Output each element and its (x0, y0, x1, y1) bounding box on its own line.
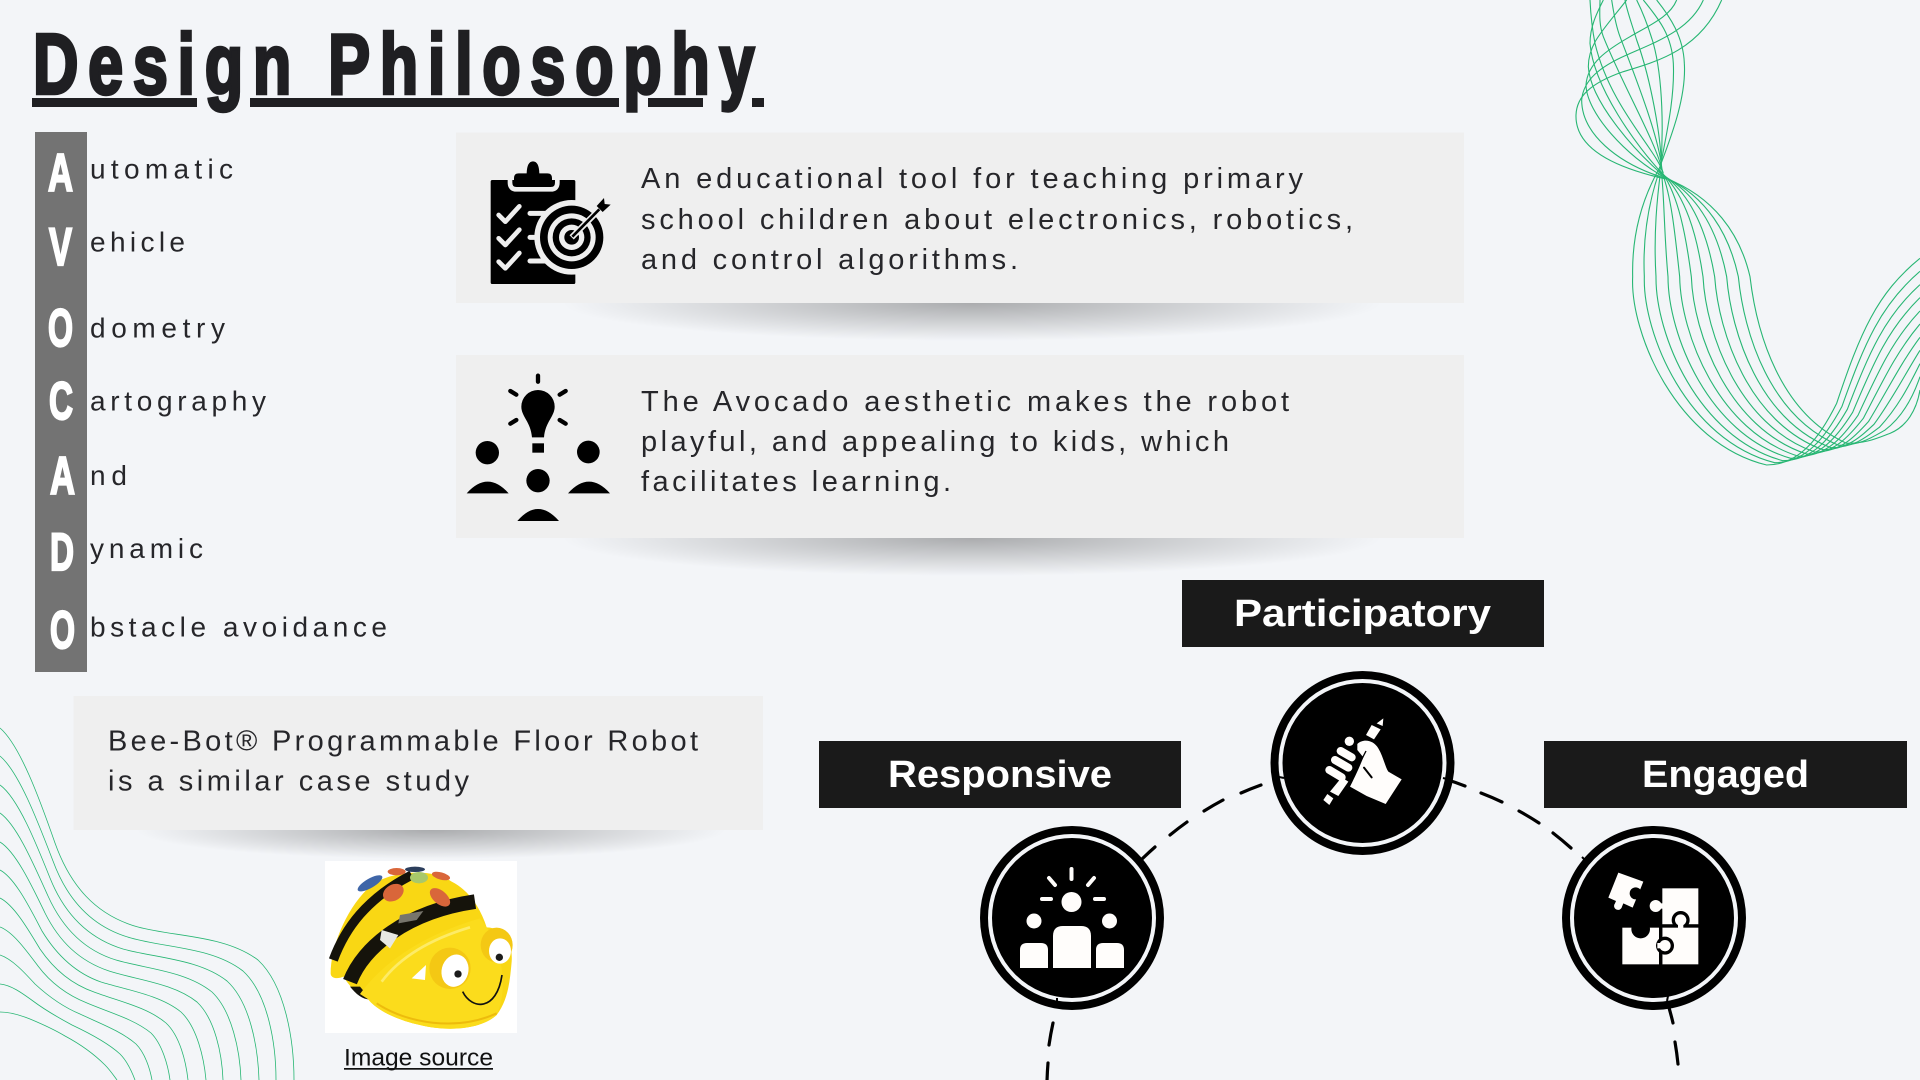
label: Participatory (1182, 580, 1544, 647)
text: educational tool: and control algorithms. (641, 244, 1018, 276)
link: image source: Image source (344, 1044, 493, 1072)
panel: bee-bot case study (74, 696, 763, 859)
acronym letters (48, 144, 75, 660)
text: educational tool (641, 163, 1353, 276)
image: bee-bot robot (325, 861, 517, 1033)
title: Design Philosophy (33, 16, 755, 112)
text: avocado aesthetic: facilitates learning. (641, 466, 951, 498)
label: Participatory: Participatory (1234, 593, 1491, 635)
acronym letters: O (48, 299, 73, 358)
acronym letters: C (49, 372, 73, 431)
acronym letters: V (49, 218, 72, 277)
text: bee-bot case study (108, 726, 698, 798)
acronym letters: O (50, 601, 75, 660)
label: Responsive (819, 741, 1181, 808)
acronym words: dometry (90, 312, 225, 344)
acronym letters: A (50, 447, 75, 506)
icon: lightbulb and people (467, 376, 610, 521)
decorative wave: top right ribbon (1576, 0, 1920, 465)
text: bee-bot case study: is a similar case study (108, 766, 470, 798)
label: Engaged: Engaged (1642, 754, 1809, 796)
text: bee-bot case study: Bee-Bot® Programmable Floor Robot (108, 726, 698, 758)
acronym: AVOCADO (35, 132, 387, 672)
decorative wave: bottom left ribbon (0, 728, 294, 1080)
label: Responsive: Responsive (888, 754, 1112, 796)
acronym letters: D (50, 523, 74, 582)
acronym words: bstacle avoidance (90, 612, 387, 642)
acronym letters: A (48, 144, 73, 203)
text: avocado aesthetic: playful, and appealing to kids, which (641, 426, 1229, 458)
text: avocado aesthetic (641, 386, 1289, 498)
panel: avocado aesthetic (456, 355, 1464, 576)
label: Engaged (1544, 741, 1907, 808)
text: educational tool: An educational tool for teaching primary (641, 163, 1304, 195)
circle icon: puzzle pieces (1562, 826, 1746, 1010)
circle icon: hand with pencil (1270, 671, 1454, 855)
circle icon: group of people with idea (980, 826, 1164, 1010)
acronym words: utomatic (90, 154, 233, 184)
acronym words: ehicle (90, 226, 185, 258)
text: educational tool: school children about electronics, robotics, (641, 204, 1353, 236)
icon: clipboard with target (491, 161, 611, 284)
panel: educational tool (456, 132, 1464, 341)
acronym words: ynamic (90, 533, 203, 564)
acronym words (90, 154, 387, 642)
dashed arc connecting circles (1047, 779, 1678, 1080)
acronym words: nd (90, 460, 127, 491)
acronym words: artography (90, 386, 266, 416)
acronym sidebar (35, 132, 87, 672)
text: avocado aesthetic: The Avocado aesthetic makes the robot (641, 386, 1289, 418)
